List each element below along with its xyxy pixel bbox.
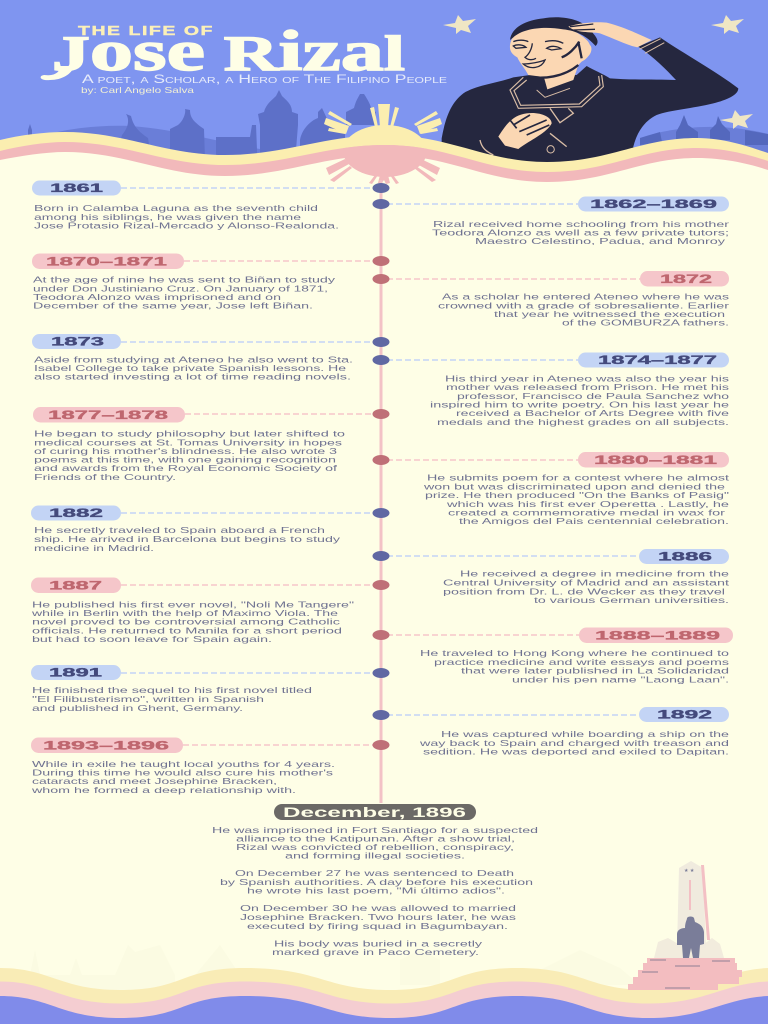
description: His third year in Ateneo was also the year his (445, 375, 729, 384)
description: Josephine Bracken. Two hours later, he was (240, 913, 516, 922)
heading pill (274, 804, 476, 820)
description (430, 375, 730, 427)
entry: 1872 (438, 271, 729, 328)
description (34, 429, 346, 482)
description: alliance to the Katipunan. After a show trial, (236, 835, 515, 844)
description: poems at this time, with one gaining recognition (34, 456, 337, 464)
year pill (31, 578, 121, 593)
wave: yellow (0, 968, 768, 1024)
year pill: 1892 (657, 710, 712, 722)
entry: 1874-1877 (430, 352, 730, 427)
footer waves (0, 968, 768, 1024)
skyline silhouette (0, 90, 768, 170)
description: executed by firing squad in Bagumbayan. (247, 922, 508, 931)
wave: pink (0, 142, 768, 240)
year pill: 1891 (49, 668, 103, 680)
description: sedition. He was deported and exiled to Dapitan. (423, 748, 729, 757)
description: practice medicine and write essays and poems (434, 658, 729, 667)
description: He traveled to Hong Kong where he continued to (420, 649, 730, 658)
byline: by: Carl Angelo Salva (81, 85, 194, 95)
description: Central University of Madrid and an assistant (443, 578, 730, 588)
description: that year he witnessed the execution (494, 310, 726, 319)
year pill (33, 407, 185, 422)
stars: ★ ★ (684, 868, 695, 874)
year pill: 1877–1878 (48, 410, 169, 422)
year pill: 1872 (660, 274, 712, 286)
description: medals and the highest grades on all subjects. (437, 418, 729, 427)
year pill (31, 506, 121, 520)
description: among his siblings, he was given the name (34, 213, 302, 222)
year pill (578, 196, 729, 212)
description: under Don Justiniano Cruz. On January of 1871, (33, 284, 328, 294)
description: medical courses at St. Tomas University in hopes (34, 438, 342, 448)
year pill (578, 352, 729, 368)
year pill (31, 665, 121, 680)
description: Isabel College to take private Spanish lessons. He (34, 364, 347, 373)
year pill (32, 254, 184, 269)
sky (0, 0, 768, 200)
description: On December 30 he was allowed to married (240, 904, 517, 913)
description: At the age of nine he was sent to Biñan to study (33, 275, 337, 284)
description: of the GOMBURZA fathers. (562, 319, 729, 328)
heading pill: December, 1896 (283, 804, 466, 820)
description: Maestro Celestino, Padua, and Monroy (475, 237, 727, 246)
icon: Rizal monument (628, 861, 742, 990)
section: December 1896 (212, 804, 539, 957)
year pill: 1862–1869 (590, 199, 717, 211)
description: He finished the sequel to his first novel titled (32, 686, 313, 695)
year pill: 1888–1889 (595, 630, 720, 642)
description: to various German universities. (534, 596, 729, 605)
description: he wrote his last poem, "Mi último adios". (247, 887, 505, 896)
year pill (639, 549, 729, 564)
description: under his pen name "Laong Laan". (512, 676, 729, 684)
description: cataracts and meet Josephine Bracken, (32, 777, 277, 786)
description: also started investing a lot of time reading novels. (34, 373, 351, 382)
description: created a commemorative medal in wax for (448, 509, 725, 518)
year pill (31, 738, 183, 753)
description: and awards from the Royal Economic Society of (34, 464, 338, 473)
entry: 1892 (418, 707, 730, 757)
entry: 1888-1889 (420, 628, 733, 684)
sun disc yellow (343, 125, 427, 177)
main title: Jose R iza l (52, 20, 405, 83)
obelisk stripes (689, 865, 710, 940)
description: and forming illegal societies. (285, 852, 465, 861)
description: He submits poem for a contest where he almost (427, 474, 730, 483)
description: medicine in Madrid. (34, 544, 154, 553)
description: Aside from studying at Ateneo he also went to Sta. (34, 355, 353, 364)
description: while in Berlin with the help of Maximo Viola. The (30, 609, 339, 618)
entry: 1870-1871 (32, 254, 337, 311)
year pill: 1886 (658, 552, 712, 564)
description (32, 686, 313, 713)
entry: 1861 (32, 180, 339, 230)
entry: 1891 (31, 665, 313, 713)
timeline spine (380, 180, 382, 803)
year pill: 1874–1877 (598, 355, 717, 367)
portrait of Jose Rizal (442, 17, 738, 187)
year pill: 1882 (49, 508, 103, 520)
sun rays: lower (326, 159, 440, 184)
description: inspired him to write poetry. On his last year he (430, 400, 730, 409)
description: Jose Protasio Rizal-Mercado y Alonso-Realonda. (34, 222, 339, 230)
year pill: 1887 (49, 580, 102, 592)
description (30, 760, 335, 795)
description: He was captured while boarding a ship on the (441, 730, 730, 739)
entry: 1873 (32, 334, 353, 382)
description: During this time he would also cure his mother's (32, 769, 333, 778)
entry: 1882 (31, 506, 342, 553)
description: position from Dr. L. de Wecker as they travel (443, 588, 725, 597)
description: officials. He returned to Manila for a short period (32, 626, 343, 636)
year pill (32, 180, 121, 196)
description: Rizal was convicted of rebellion, conspiracy, (236, 843, 514, 852)
description: While in exile he taught local youths for 4 years. (32, 760, 335, 769)
year pill: 1870–1871 (46, 256, 168, 268)
year pill (32, 334, 121, 349)
description (33, 275, 337, 311)
description: ship. He arrived in Barcelona but begins to study (34, 535, 342, 544)
wave: yellow (0, 132, 768, 240)
description: but had to soon leave for Spain again. (32, 635, 272, 644)
year pill: 1893–1896 (43, 740, 169, 752)
stepped base (628, 958, 742, 990)
description (34, 526, 342, 553)
description: way back to Spain and charged with treason and (418, 739, 730, 748)
timeline dots (372, 183, 390, 750)
description: As a scholar he entered Ateneo where he was (442, 293, 729, 302)
kicker: THE LIFE OF (78, 24, 214, 38)
description (420, 649, 730, 684)
description: the Amigos del Pais centennial celebration. (459, 517, 729, 526)
year pill: 1873 (51, 336, 104, 348)
description: and published in Ghent, Germany. (32, 704, 243, 713)
description (34, 204, 339, 230)
entry: 1887 (30, 578, 354, 644)
description: Born in Calamba Laguna as the seventh child (34, 204, 319, 213)
star (711, 15, 744, 34)
description: crowned with a grade of sobresaliente. Earlier (438, 301, 729, 310)
entry: 1880-1881 (422, 452, 730, 526)
entry: 1886 (443, 549, 730, 605)
description: "El Filibusterismo", written in Spanish (32, 695, 265, 704)
description: He published his first ever novel, "Noli Me Tangere" (32, 600, 354, 609)
wave: periwinkle (0, 996, 768, 1024)
description: received a Bachelor of Arts Degree with five (456, 409, 730, 418)
wave: pink (0, 982, 768, 1024)
title text (41, 20, 447, 95)
subtitle: A poet, a Scholar, a Hero of The Filipino People (82, 74, 447, 86)
star (443, 15, 476, 34)
description: He was imprisoned in Fort Santiago for a suspected (212, 826, 539, 835)
sun rays: upper (324, 104, 442, 134)
description (34, 355, 353, 382)
description: Rizal received home schooling from his mother (433, 220, 729, 229)
description: December of the same year, Jose left Biñan. (33, 302, 313, 311)
year pill (639, 707, 729, 722)
description: prize. He then produced "On the Banks of Pasig" (425, 491, 729, 500)
description: whom he formed a deep relationship with. (30, 786, 296, 795)
description (212, 826, 539, 957)
obelisk (677, 861, 706, 948)
description (438, 293, 729, 328)
description: He received a degree in medicine from the (460, 570, 730, 579)
entry: 1893-1896 (30, 738, 335, 795)
description: which was his first ever Operetta . Lastly, he (445, 500, 730, 509)
description: marked grave in Paco Cemetery. (272, 948, 479, 957)
description: He secretly traveled to Spain aboard a French (34, 526, 326, 535)
statue silhouette (677, 916, 704, 958)
description: On December 27 he was sentenced to Death (235, 869, 515, 878)
year pill: 1861 (50, 183, 104, 195)
year pill: 1880–1881 (594, 455, 718, 467)
description: He began to study philosophy but later shifted to (34, 429, 346, 438)
entry: 1877-1878 (33, 407, 346, 482)
year pill (640, 271, 729, 286)
description (443, 570, 730, 605)
description: Teodora Alonzo as well as a few private tutors; (432, 229, 729, 238)
description: mother was released from Prison. He met his (446, 383, 729, 392)
description (418, 730, 730, 757)
description: novel proved to be controversial among Catholic (32, 618, 340, 627)
sun disc pink (344, 145, 427, 177)
description: Teodora Alonzo was imprisoned and on (33, 293, 282, 302)
year pill (578, 452, 729, 468)
header panel (0, 0, 768, 200)
description: Friends of the Country. (34, 473, 176, 482)
description: of curing his mother's blindness. He also wrote 3 (34, 447, 338, 456)
wave: cream (0, 152, 768, 240)
description: by Spanish authorities. A day before his execution (220, 878, 534, 887)
description: won but was discriminated upon and denied the (422, 483, 726, 492)
description: professor, Francisco de Paula Sanchez who (457, 392, 730, 401)
description (432, 220, 729, 246)
description (30, 600, 354, 644)
description: His body was buried in a secretly (274, 940, 484, 948)
entry: 1862-1869 (432, 196, 729, 246)
connector lines (121, 188, 640, 745)
star (720, 110, 753, 129)
faint skyline in footer (30, 945, 640, 990)
header waves (0, 125, 768, 200)
description (422, 474, 730, 526)
description: that were later published in La Solidaridad (461, 666, 730, 676)
year pill (579, 628, 733, 643)
monument wings (654, 938, 724, 958)
